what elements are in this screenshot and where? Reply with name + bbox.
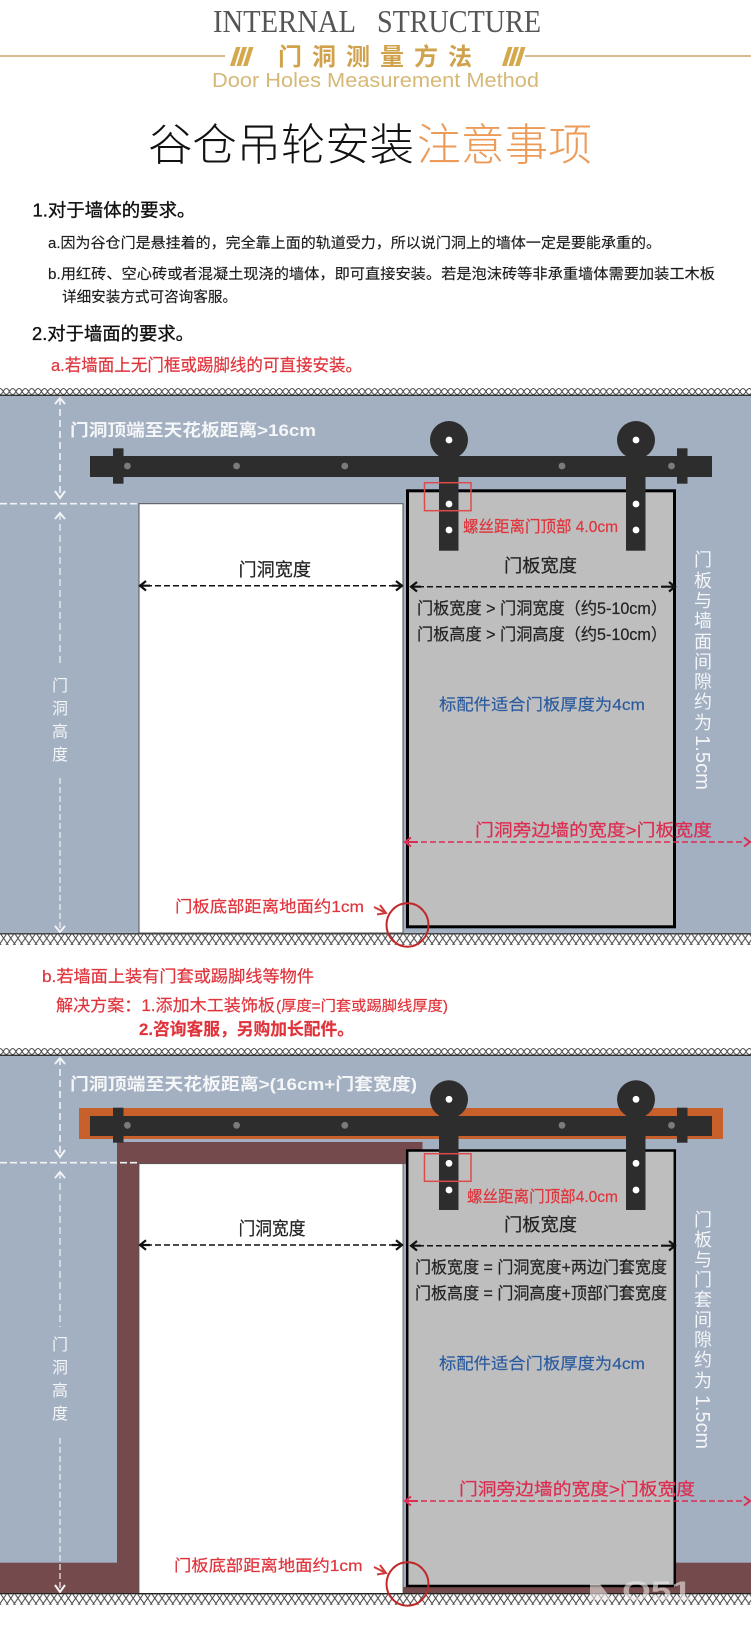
door width arrow 2 (411, 1241, 675, 1250)
side wall width label 2: 门洞旁边墙的宽度>门板宽度 (459, 1480, 695, 1499)
watermark (590, 1576, 692, 1606)
section 1 item b: b.用红砖、空心砖或者混凝土现浇的墙体，即可直接安装。若是泡沫砖等非承重墙体需要加装工木板 (48, 265, 716, 283)
door height label 1: 门洞高度 (52, 677, 68, 764)
side gap label 2: 门板与门套间隙约为 (694, 1210, 712, 1391)
section 1 item b (48, 265, 716, 306)
side wall width label 1: 门洞旁边墙的宽度>门板宽度 (475, 821, 712, 840)
screw distance label 2: 螺丝距离门顶部4.0cm (467, 1188, 618, 1206)
door opening 2 (139, 1164, 403, 1594)
case b heading: b.若墙面上装有门套或踢脚线等物件 (42, 967, 314, 986)
floor gap circle 1 (386, 903, 428, 947)
floor gap circle 2 (386, 1562, 428, 1606)
header: internal structure (213, 3, 541, 39)
ceiling hatch 1 (0, 388, 751, 396)
side wall width arrow 2 (405, 1496, 750, 1506)
opening width arrow 1 (140, 581, 402, 590)
door thickness note 1: 标配件适合门板厚度为4cm (439, 696, 645, 714)
header: Chinese subtitle: 门洞测量方法 (278, 43, 472, 71)
header: internal structure: STRUCTURE (377, 3, 541, 39)
door opening 1 (139, 504, 403, 933)
side gap label 1: 门板与墙面间隙约为 (694, 550, 712, 733)
main title: 谷仓吊轮安装 (148, 109, 414, 173)
door width label 1: 门板宽度 (504, 556, 577, 576)
floor gap label 1: 门板底部距离地面约1cm (175, 898, 364, 916)
watermark: O51 (622, 1576, 692, 1606)
section 2 case a: a.若墙面上无门框或踢脚线的可直接安装。 (51, 356, 362, 375)
door height dimension 1 (55, 513, 65, 933)
top clearance label 1: 门洞顶端至天花板距离>16cm (70, 420, 316, 440)
door size rules 1: 门板宽度 > 门洞宽度（约5-10cm） (417, 599, 667, 618)
section 1 item b: 详细安装方式可咨询客服。 (62, 289, 237, 306)
barn door rail and hangers 2 (90, 1080, 712, 1210)
diagram 1 (0, 388, 751, 947)
floor hatch 1 (0, 933, 751, 945)
barn door rail and hangers 1 (90, 421, 712, 551)
main title: 注意事项 (417, 109, 592, 173)
opening width label 2: 门洞宽度 (238, 1219, 306, 1239)
section 1 item a: a.因为谷仓门是悬挂着的，完全靠上面的轨道受力，所以说门洞上的墙体一定是要能承重的。 (48, 234, 661, 252)
red highlight box 2 (424, 1154, 471, 1181)
door width arrow 1 (411, 582, 675, 592)
side gap label 2: 1.5cm (691, 1395, 713, 1449)
opening width label 1: 门洞宽度 (238, 560, 311, 580)
screw distance label 1: 螺丝距离门顶部 4.0cm (463, 518, 618, 536)
floor hatch 2 (0, 1593, 751, 1605)
wall 2 (0, 1056, 751, 1594)
side gap label 1 (691, 550, 713, 790)
solution line 1: (厚度=门套或踢脚线厚度) (276, 998, 448, 1015)
side gap label 1: 1.5cm (691, 735, 713, 790)
floor gap arrow 2 (374, 1565, 386, 1574)
door size rules 2: 门板高度 = 门洞高度+顶部门套宽度 (415, 1284, 667, 1303)
solution line 1 (56, 996, 448, 1015)
top clearance label 2: 门洞顶端至天花板距离>(16cm+门套宽度) (70, 1074, 417, 1094)
header: gold rule with slashes (0, 47, 751, 66)
door panel 1 (408, 491, 674, 927)
main title (148, 109, 592, 173)
side wall width arrow 1 (405, 838, 750, 846)
door width label 2: 门板宽度 (504, 1215, 577, 1235)
floor gap arrow 1 (374, 905, 386, 914)
door casing and baseboard (0, 1142, 751, 1594)
section 1 heading: 1.对于墙体的要求。 (32, 200, 196, 220)
door size rules 2 (415, 1258, 667, 1303)
door size rules 1 (417, 599, 667, 644)
door size rules 1: 门板高度 > 门洞高度（约5-10cm） (417, 625, 667, 644)
opening width arrow 2 (140, 1240, 402, 1250)
section 2 heading: 2.对于墙面的要求。 (32, 324, 194, 344)
top clearance dimension 1 (0, 398, 139, 504)
side gap label 2 (691, 1210, 713, 1449)
door height label 2: 门洞高度 (52, 1336, 68, 1423)
header: English subtitle: Door Holes Measurement Method (212, 69, 539, 92)
wall 1 (0, 396, 751, 933)
door panel 2 (407, 1150, 675, 1586)
ceiling hatch 2 (0, 1048, 751, 1056)
door height dimension 2 (55, 1172, 65, 1592)
diagram 2 (0, 1048, 751, 1606)
door thickness note 2: 标配件适合门板厚度为4cm (439, 1355, 645, 1373)
solution line 2: 2.咨询客服，另购加长配件。 (139, 1019, 354, 1039)
floor gap label 2: 门板底部距离地面约1cm (174, 1557, 362, 1575)
red highlight box 1 (424, 483, 471, 511)
top clearance dimension 2 (0, 1058, 139, 1163)
door size rules 2: 门板宽度 = 门洞宽度+两边门套宽度 (415, 1258, 667, 1277)
solution line 1: 解决方案：1.添加木工装饰板 (56, 996, 275, 1015)
header: internal structure: INTERNAL (213, 3, 356, 39)
decorative wood board (79, 1108, 723, 1139)
